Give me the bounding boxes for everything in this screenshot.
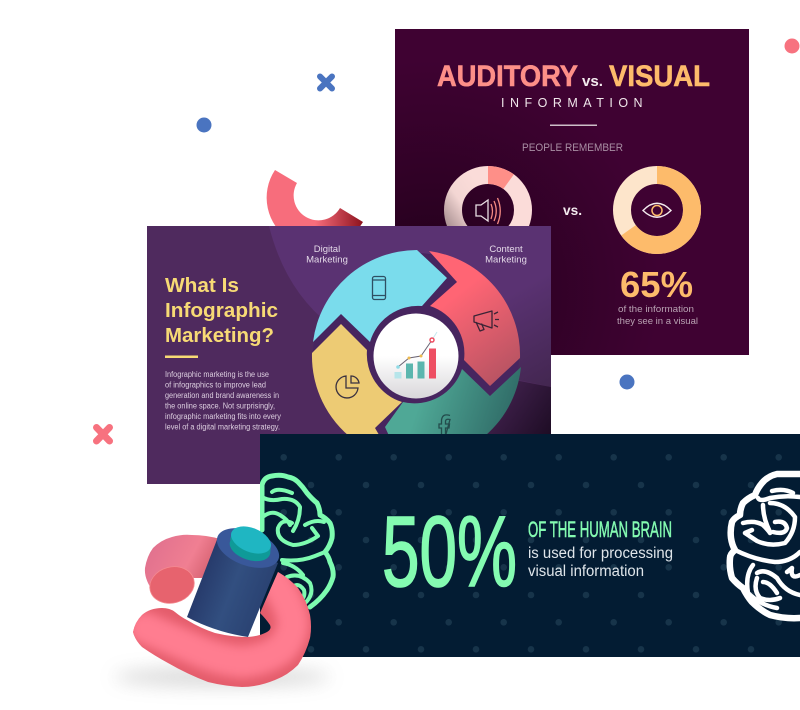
label: content marketing: Content (489, 244, 523, 255)
decoration: blue dot center (620, 374, 634, 390)
torus lower arm (133, 572, 311, 687)
stat: 50%: 50% (382, 496, 517, 608)
chart icon: rising bars (394, 332, 437, 378)
segment: yellow arrow (312, 324, 402, 440)
torus upper arm (145, 535, 220, 590)
panel: human brain (260, 434, 800, 657)
stat: 65%: 65% (620, 264, 693, 305)
title: auditory vs visual: AUDITORY (437, 60, 578, 93)
decoration: blue dot left (196, 118, 212, 132)
label: people remember: PEOPLE REMEMBER (522, 142, 623, 154)
heading: of the human brain: OF THE HUMAN BRAIN (528, 517, 672, 542)
text: brain caption (528, 545, 673, 580)
panel: auditory vs visual (395, 29, 749, 355)
body text: the online space. Not surprisingly, (165, 402, 275, 410)
caption: visual stat (617, 304, 698, 327)
body text: infographic marketing fits into every (165, 412, 281, 421)
dot pattern background (280, 454, 782, 653)
label: content marketing: Marketing (485, 254, 527, 266)
subtitle: information: INFORMATION (501, 96, 648, 110)
label: digital marketing: Digital (314, 244, 340, 255)
3D shape: torus and cylinder (133, 526, 311, 687)
body text: generation and brand awareness in (165, 391, 279, 400)
icon: speaker (476, 198, 500, 224)
heading (165, 274, 278, 347)
decoration: pink dot top right (784, 38, 800, 54)
decoration: pink cross (96, 428, 110, 441)
label: content marketing (486, 246, 526, 264)
cylinder (187, 520, 285, 637)
title: auditory vs visual: vs. (582, 73, 603, 90)
chart: visual donut (622, 175, 692, 245)
caption: visual stat: of the information (618, 304, 694, 315)
icon: white brain (730, 474, 800, 618)
heading rule (165, 356, 198, 358)
segment: blue arrow (313, 250, 447, 342)
title: auditory vs visual: VISUAL (609, 60, 710, 93)
caption: visual stat: they see in a visual (617, 316, 698, 327)
title: auditory vs visual (437, 60, 710, 93)
icon: megaphone (474, 311, 499, 331)
3D shape shadow (114, 668, 330, 686)
segment: green arrow (385, 367, 521, 434)
body text (165, 370, 281, 432)
cylinder teal cap (226, 521, 275, 566)
icon: pie chart (336, 376, 359, 398)
decoration: blue cross (320, 76, 332, 88)
label: vs: vs. (563, 202, 582, 218)
icon: phone (372, 276, 386, 300)
torus end cap (146, 562, 198, 608)
heading: What Is (165, 274, 239, 297)
chart: auditory donut (453, 175, 523, 245)
text: brain caption: visual information (528, 563, 644, 580)
label: digital marketing (306, 246, 348, 264)
icon: green brain (262, 475, 333, 607)
body text: Infographic marketing is the use (165, 370, 269, 379)
center hub (374, 314, 458, 398)
decoration: pink arc (267, 170, 363, 240)
body text: of infographics to improve lead (165, 380, 266, 390)
icon: facebook f (439, 415, 450, 436)
heading: Infographic (165, 299, 278, 322)
wheel backing disc (314, 253, 508, 396)
label: digital marketing: Marketing (306, 254, 348, 266)
body text: level of a digital marketing strategy. (165, 422, 280, 432)
segment: red arrow (429, 251, 520, 386)
icon: eye (643, 203, 671, 217)
panel: what is infographic marketing (147, 226, 551, 484)
text: brain caption: is used for processing (528, 545, 673, 562)
divider (550, 124, 597, 126)
heading: Marketing? (165, 324, 274, 347)
